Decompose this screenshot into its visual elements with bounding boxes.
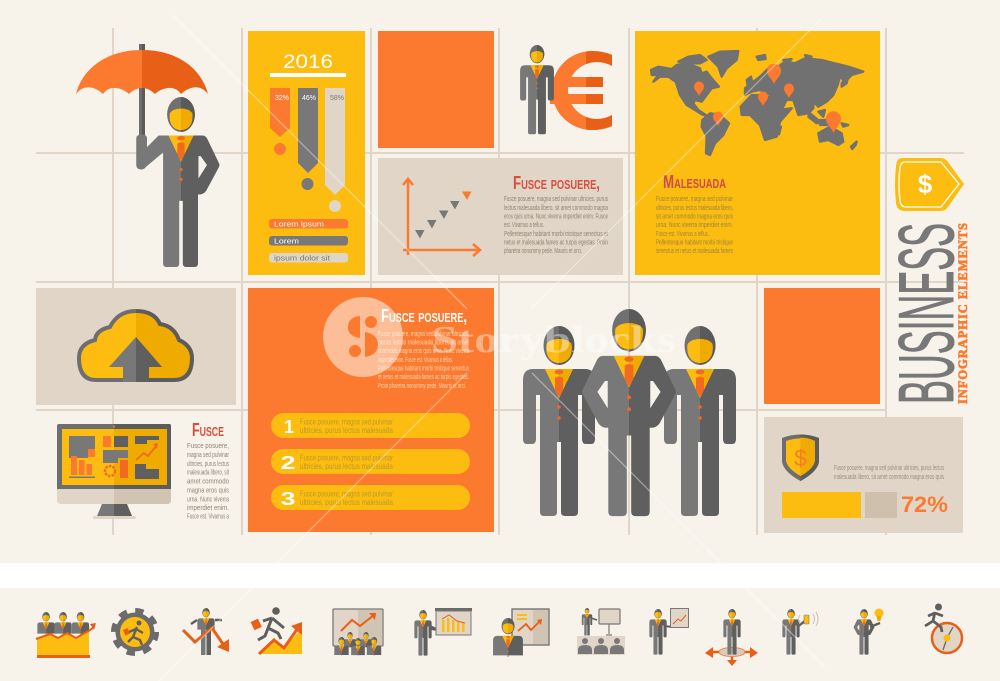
chart: axes arrows <box>403 179 480 256</box>
list item 2 <box>271 449 470 474</box>
list item 3: Fusce posuere, magna sed pulvinar <box>300 488 393 498</box>
text block: netus et malesuada fames ac turpis egestas. Proin <box>504 240 608 246</box>
text block: sit amet commodo magna eros quis <box>656 214 733 220</box>
icon: euro symbol with businessman <box>520 45 612 134</box>
number: 72%: 72% <box>901 492 948 517</box>
text block: eros quis urna. Nunc viverra imperdiet enim. Fusce <box>504 214 608 220</box>
chart: 58 percent bar <box>325 88 345 212</box>
subtitle: infographic elements: INFOGRAPHIC ELEMENTS <box>956 223 970 404</box>
heading: Fusce <box>192 419 224 440</box>
watermark: logo circle <box>323 297 403 377</box>
paragraph: Fusce est. Vivamus a <box>187 514 229 521</box>
text block: Pellentesque habitant morbi tristique senectus <box>378 366 469 372</box>
icon: euro <box>550 51 612 130</box>
icon 11: man with phone <box>782 609 818 655</box>
list item 1: 1 <box>284 417 294 437</box>
text: BUSINESS <box>882 223 970 404</box>
text block: et netus et malesuada fames ac turpis egestas. <box>378 374 469 381</box>
text block: Fusce posuere, magna sed pulvinar ultricies, purus <box>504 196 608 203</box>
legend: Lorem <box>274 236 299 246</box>
icon: businessman <box>520 45 554 134</box>
paragraph: magna sed pulvinar <box>187 452 229 459</box>
legend <box>269 219 348 262</box>
text block: est. Vivamus a tellus. <box>504 222 544 229</box>
legend: ipsum dolor sit <box>274 254 331 262</box>
white separator band <box>0 563 1000 588</box>
list item 3 <box>271 485 470 510</box>
icon 8: speaker with audience <box>577 608 625 655</box>
text block: imperdiet enim. Fusce est. Vivamus a tellus. <box>378 357 453 364</box>
text block <box>378 331 469 390</box>
icon 6: man with bar chart board <box>414 608 472 656</box>
icon: dollar shield: $ <box>794 445 807 471</box>
icon 2: gear with runner <box>114 611 156 653</box>
icon 1: team with rising chart <box>36 612 96 658</box>
text block: malesuada libero, sit amet commodo magna eros quis <box>834 474 944 481</box>
text block: Pellentesque habitant morbi tristique senectus et <box>504 231 608 238</box>
icon: umbrella <box>76 44 208 139</box>
icon 5: presentation to audience <box>333 609 383 656</box>
list item 2: 2 <box>280 453 296 473</box>
text block: Fusce <box>187 419 229 521</box>
icon: dollar badge: $ <box>918 169 933 199</box>
panel: orange square right <box>764 288 880 404</box>
text block <box>656 196 733 255</box>
text block: purus lectus malesuada libero, sit amet <box>378 340 469 346</box>
panel: orange square top <box>378 31 494 148</box>
chart: triangle points <box>415 192 472 238</box>
paragraph: amet commodo <box>187 479 229 486</box>
panel: line chart and text <box>378 158 623 275</box>
panel: numbered list <box>248 288 494 532</box>
text block: commodo magna eros quis urna. Nunc viverra <box>378 348 469 355</box>
text block: senectus et netus et malesuada fames <box>656 248 733 255</box>
icon: dollar shield <box>782 434 819 481</box>
text block: Fusce posuere, magna sed pulvinar <box>656 196 733 203</box>
panel: world map <box>635 31 880 275</box>
chart: progress bar <box>782 492 897 518</box>
panel: umbrella businessman <box>76 44 219 267</box>
icon 7: bust with chart board <box>493 609 549 657</box>
icon 4: runner on rising chart <box>251 607 302 654</box>
legend: Lorem ipsum <box>274 220 324 228</box>
paragraph: magna eros quis <box>187 488 229 495</box>
list item 3: ultricies, purus lectus malesuada <box>300 497 393 507</box>
list item 3: 3 <box>280 489 296 509</box>
text block: lectus malesuada libero, sit amet commodo magna <box>504 205 608 212</box>
watermark: diagonal lines <box>150 15 825 681</box>
list item 1: ultricies, purus lectus malesuada <box>300 425 393 435</box>
chart: 46 percent bar <box>298 88 318 190</box>
watermark: Storyblocks: Storyblocks <box>431 319 676 361</box>
icon 3: man with falling arrow <box>183 608 229 655</box>
chart: 58 percent bar: 58% <box>330 95 344 102</box>
icon: businessman <box>136 97 219 267</box>
text block: ultricies, purus lectus malesuada libero, <box>656 205 733 212</box>
text block: urna. Nunc viverra imperdiet enim. <box>656 222 733 229</box>
icon 13: runner with clock <box>925 604 962 653</box>
panel: progress 72 percent <box>764 417 963 533</box>
heading: Fusce posuere, <box>381 305 467 326</box>
heading: Fusce posuere, <box>513 172 600 193</box>
chart: world map <box>651 51 863 155</box>
text block <box>504 196 608 255</box>
icon: dollar badge <box>895 158 964 211</box>
list item 2: ultricies, purus lectus malesuada <box>300 461 393 471</box>
text block: Fusce posuere, magna sed pulvinar ultricies, <box>378 331 469 338</box>
list item 1 <box>271 413 470 438</box>
text block: Pellentesque habitant morbi tristique <box>656 240 733 246</box>
text block <box>834 465 944 481</box>
text block: Proin pharetra nonummy pede. Mauris et orci. <box>378 383 466 390</box>
icon: map pins <box>694 64 841 133</box>
text block: Fusce est. Vivamus a tellus. <box>656 231 709 238</box>
chart: 46 percent bar: 46% <box>302 95 316 102</box>
paragraph <box>187 443 229 521</box>
icon: three businessmen <box>523 309 736 516</box>
paragraph: imperdiet enim. <box>187 505 229 512</box>
paragraph: Fusce posuere, <box>187 443 229 450</box>
chart: 32 percent bar: 32% <box>275 95 289 102</box>
icon 12: man with light bulb <box>854 608 884 655</box>
paragraph: malesuada libero, sit <box>187 470 229 477</box>
panel: cloud upload <box>36 288 236 405</box>
icon 10: man with direction arrows <box>705 609 758 666</box>
text block: pharetra nonummy pede. Mauris et orci. <box>504 248 582 255</box>
icon: monitor dashboard <box>57 424 171 519</box>
paragraph: ultricies, purus lectus <box>187 461 229 468</box>
list item 2: Fusce posuere, magna sed pulvinar <box>300 452 393 462</box>
heading: Malesuada <box>663 171 726 192</box>
icon 9: man with small chart <box>649 608 688 655</box>
icon: cloud <box>79 311 192 382</box>
chart: 32 percent bar <box>270 88 290 155</box>
panel: 2016 bar chart <box>248 31 365 275</box>
list item 1: Fusce posuere, magna sed pulvinar <box>300 416 393 426</box>
paragraph: urna. Nunc viverra <box>187 496 229 503</box>
heading: 2016: 2016 <box>283 52 333 73</box>
